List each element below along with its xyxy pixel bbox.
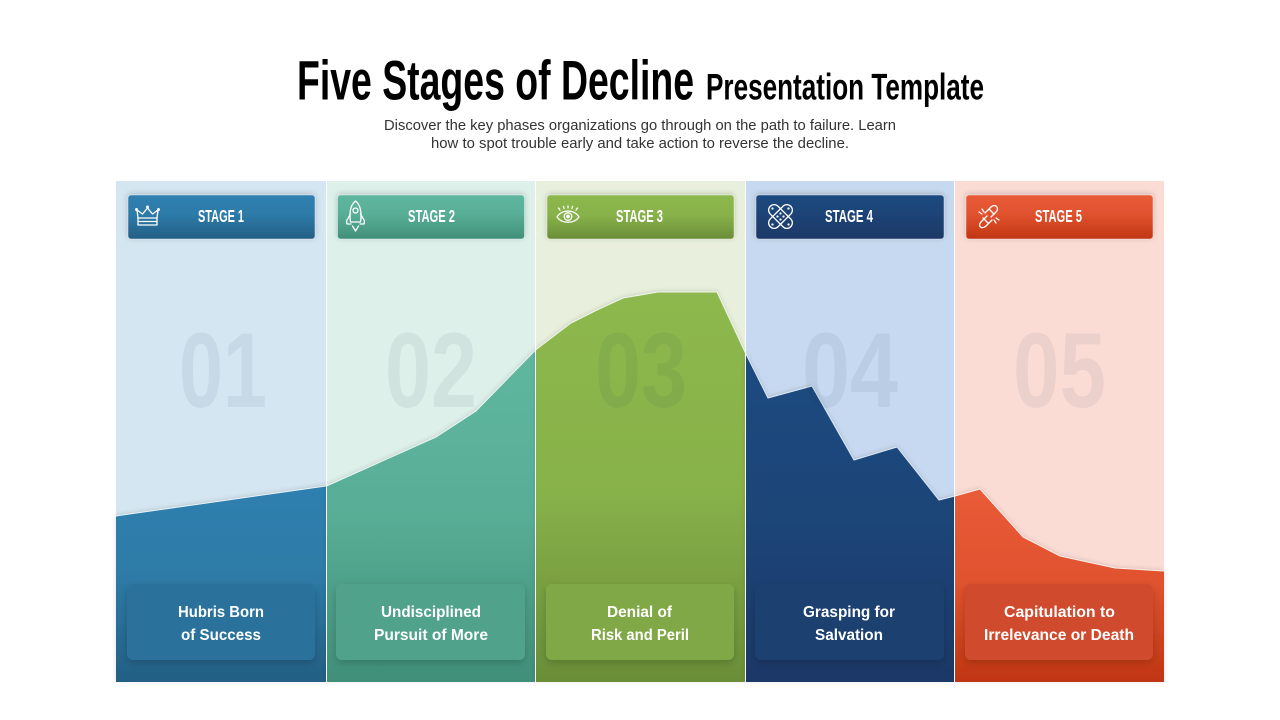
panel: stage 3	[536, 181, 746, 682]
icon: eye	[557, 206, 579, 222]
stage 2 caption	[336, 584, 525, 660]
stage 1 caption: Hubris Born	[178, 604, 264, 621]
number 01: 01	[179, 310, 267, 430]
description text: Discover the key phases organizations go through on the path to failure. Learn	[384, 118, 896, 134]
stage 1 caption	[127, 584, 315, 660]
stage 4 caption	[755, 584, 944, 660]
icon: bandage	[766, 202, 795, 231]
number 04: 04	[802, 310, 898, 430]
stage 4 header: STAGE 4	[825, 206, 873, 226]
number 03: 03	[595, 310, 687, 430]
panel: stage 5	[955, 181, 1164, 682]
stage 2 caption: Undisciplined	[381, 604, 481, 621]
description text: how to spot trouble early and take action to reverse the decline.	[431, 136, 849, 152]
description text	[384, 118, 896, 152]
icon: rocket	[346, 201, 364, 231]
icon: crown	[136, 206, 159, 225]
stage 5 header	[966, 195, 1153, 239]
number 02: 02	[385, 310, 477, 430]
stage 3 caption	[546, 584, 734, 660]
stage 1 header	[128, 195, 315, 239]
stage 3 header	[547, 195, 734, 239]
stage 3 caption: Risk and Peril	[591, 627, 689, 644]
icon: broken chain	[979, 206, 999, 228]
stage 4 caption: Grasping for	[803, 604, 895, 621]
stage 3 caption: Denial of	[607, 604, 673, 621]
title: Five Stages of Decline	[297, 48, 694, 112]
panel: stage 4	[746, 181, 955, 682]
panel: stage 2	[326, 181, 536, 682]
number 05: 05	[1013, 310, 1106, 430]
stage 4 header	[756, 195, 944, 239]
stage 2 caption: Pursuit of More	[374, 627, 488, 644]
stage 3 header: STAGE 3	[616, 206, 663, 226]
stage 5 caption: Irrelevance or Death	[984, 627, 1134, 644]
stage 2 header	[338, 195, 524, 239]
stage 5 caption: Capitulation to	[1004, 604, 1115, 621]
stage 4 caption: Salvation	[815, 627, 883, 644]
panel: stage 1	[116, 181, 326, 682]
stage 5 caption	[965, 584, 1153, 660]
stage 5 header: STAGE 5	[1035, 206, 1082, 226]
stage 1 caption: of Success	[181, 627, 261, 644]
stage 1 header: STAGE 1	[198, 206, 244, 226]
subtitle: template label: Presentation Template	[706, 66, 984, 108]
stage 2 header: STAGE 2	[408, 206, 455, 226]
